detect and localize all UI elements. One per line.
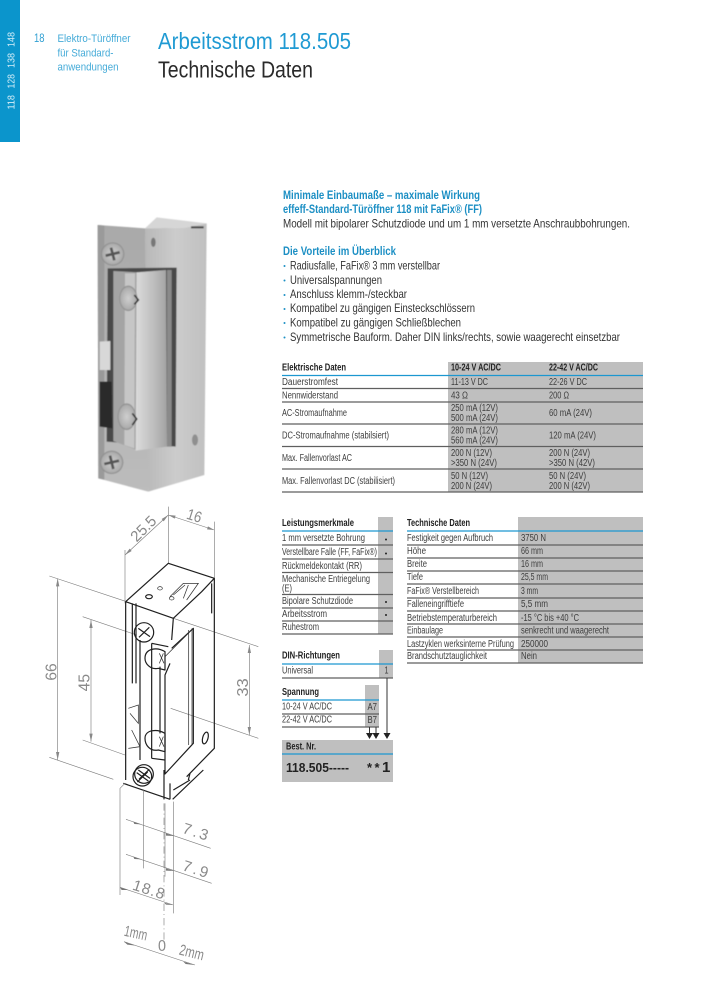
subtitle: Technische Daten [158, 56, 313, 82]
table header: 10-24 V AC/DC [451, 362, 501, 374]
table rows: Ruhestrom [282, 622, 319, 633]
Spannung rows: A7 [368, 702, 377, 713]
dimension lines: 25.5 [127, 513, 160, 545]
DIN row: 1 [384, 666, 389, 676]
table rows: 60 mA (24V) [549, 408, 592, 419]
drawing: lower part and offset scale: 2mm [177, 942, 206, 964]
drawing: lower part and offset scale: 7.9 [180, 858, 210, 882]
table rows: Bipolare Schutzdiode [282, 596, 353, 607]
screws [134, 623, 165, 783]
intro heading: Minimale Einbaumaße – maximale Wirkung [283, 190, 480, 202]
table: DIN-Richtungen [282, 650, 393, 678]
drawing: lower part and offset scale: 18.8 [130, 877, 167, 903]
Spannung rows: 22-42 V AC/DC [282, 714, 332, 726]
table rows: 120 mA (24V) [549, 430, 596, 442]
table header: Elektrische Daten [282, 362, 346, 374]
table rows: Höhe [407, 546, 426, 557]
dimension lines: 45 [76, 674, 93, 691]
table rows: -15 °C bis +40 °C [521, 613, 579, 624]
table rows: 11-13 V DC [451, 377, 488, 388]
table rows: Rückmeldekontakt (RR) [282, 561, 362, 572]
table header [282, 362, 598, 374]
table rows: Falleneingrifftiefe [407, 599, 464, 610]
table rows: 22-26 V DC [549, 377, 587, 388]
DIN row: Universal [282, 666, 313, 676]
title: Arbeitsstrom 118.505 [158, 28, 351, 54]
order number: * [374, 760, 380, 775]
advantages list [283, 245, 620, 344]
table rows: 3750 N [521, 533, 546, 544]
table rows: 16 mm [521, 559, 543, 570]
table rows: Mechanische Entriegelung [282, 574, 370, 585]
table rows: 50 N (12V) [451, 471, 488, 482]
dimension lines: 33 [235, 678, 252, 697]
table rows: 200 N (24V) [451, 481, 492, 492]
order label: Best. Nr. [286, 742, 316, 752]
table rows: 66 mm [521, 546, 543, 557]
sidebar series numbers [6, 32, 18, 110]
lock body [126, 563, 214, 783]
sidebar series numbers: 128 [6, 74, 18, 88]
table rows: Festigkeit gegen Aufbruch [407, 533, 493, 544]
table rows: Verstellbare Falle (FF, FaFix®) [282, 547, 377, 558]
section label [58, 33, 131, 74]
table rows: 200 N (24V) [549, 448, 590, 459]
table rows: 250 mA (12V) [451, 403, 498, 414]
table rows: 43 Ω [451, 390, 468, 402]
sidebar series numbers: 118 [6, 95, 18, 110]
product photo: door opener [98, 217, 207, 492]
list items: Kompatibel zu gängigen Schließblechen [290, 316, 461, 330]
table rows: DC-Stromaufnahme (stabilsiert) [282, 430, 389, 442]
page number: 18 [34, 33, 44, 45]
table rows: Arbeitsstrom [282, 609, 327, 620]
table rows: Dauerstromfest [282, 377, 338, 388]
intro heading: effeff-Standard-Türöffner 118 mit FaFix® (FF) [283, 204, 482, 216]
intro text block [283, 190, 630, 230]
table rows: Max. Fallenvorlast AC [282, 453, 352, 464]
table rows: 200 N (12V) [451, 448, 492, 459]
table rows: (E) [282, 584, 292, 594]
table: Spannung [282, 685, 379, 727]
dimension lines [44, 506, 258, 779]
table rows: 3 mm [521, 586, 538, 597]
table header: Technische Daten [407, 518, 470, 529]
table rows: Breite [407, 559, 427, 570]
table rows: 5,5 mm [521, 599, 548, 610]
list items: Radiusfalle, FaFix® 3 mm verstellbar [290, 258, 440, 272]
order number: 118.505----- [286, 760, 349, 775]
table rows: 50 N (24V) [549, 471, 586, 482]
table rows: 500 mA (24V) [451, 413, 498, 424]
dimension lines: 16 [184, 506, 204, 527]
table: Leistungsmerkmale [282, 517, 393, 634]
table rows: 200 N (42V) [549, 481, 590, 492]
table: Elektrische Daten [282, 362, 643, 492]
table header: Leistungsmerkmale [282, 518, 354, 529]
sidebar series numbers: 138 [6, 53, 18, 68]
Spannung rows [282, 702, 377, 726]
Spannung rows: B7 [368, 715, 377, 726]
arrows to order number [366, 678, 390, 739]
Spannung rows: 10-24 V AC/DC [282, 702, 332, 712]
table rows: FaFix® Verstellbereich [407, 586, 479, 597]
drawing: lower part and offset scale [120, 767, 212, 965]
sidebar series numbers: 148 [6, 32, 18, 47]
table rows: Betriebstemperaturbereich [407, 613, 497, 624]
list heading: Die Vorteile im Überblick [283, 245, 397, 258]
drawing: lower part and offset scale: 1mm [123, 923, 149, 944]
sidebar tab [0, 0, 20, 142]
section label: für Standard- [58, 48, 114, 60]
table rows: >350 N (24V) [451, 458, 497, 469]
list items: Symmetrische Bauform. Daher DIN links/rechts, sowie waagerecht einsetzbar [290, 330, 620, 344]
table rows: >350 N (42V) [549, 458, 595, 469]
DIN row [282, 666, 389, 676]
table rows: Brandschutztauglichkeit [407, 651, 487, 662]
order number: 1 [382, 759, 390, 776]
table rows: Einbaulage [407, 626, 443, 636]
technical drawing with dimensions [44, 506, 258, 965]
intro heading [283, 190, 482, 216]
title [158, 28, 351, 82]
Spannung heading: Spannung [282, 687, 319, 698]
table rows: senkrecht und waagerecht [521, 626, 609, 636]
table rows: AC-Stromaufnahme [282, 408, 347, 419]
table rows: Nein [521, 651, 537, 662]
table rows [407, 533, 609, 662]
order number [286, 759, 390, 776]
table rows: Tiefe [407, 572, 423, 583]
table rows: Nennwiderstand [282, 390, 338, 402]
section label: anwendungen [58, 62, 118, 74]
list items: Anschluss klemm-/steckbar [290, 287, 407, 301]
table rows: 25,5 mm [521, 572, 548, 583]
order number: * [367, 760, 373, 775]
order number box [282, 740, 393, 782]
drawing: lower part and offset scale: 0 [158, 938, 166, 955]
DIN heading: DIN-Richtungen [282, 650, 340, 662]
section label: Elektro-Türöffner [58, 33, 131, 45]
drawing: upper part [44, 506, 258, 783]
table rows [282, 533, 387, 633]
list items: Universalspannungen [290, 273, 382, 287]
table rows: 280 mA (12V) [451, 426, 498, 436]
table rows: Max. Fallenvorlast DC (stabilisiert) [282, 476, 395, 487]
list items: Kompatibel zu gängigen Einsteckschlössern [290, 301, 475, 315]
drawing: lower part and offset scale: 7.3 [180, 820, 210, 845]
table rows [282, 377, 596, 492]
dimension lines: 66 [44, 663, 61, 681]
table: Technische Daten [407, 517, 643, 663]
table rows: 1 mm versetzte Bohrung [282, 533, 365, 544]
list items [284, 258, 620, 344]
intro sentence: Modell mit bipolarer Schutzdiode und um 1 mm versetzte Anschraubbohrungen. [283, 216, 630, 230]
table rows: 200 Ω [549, 390, 569, 402]
table rows: Lastzyklen werksinterne Prüfung [407, 639, 514, 650]
table header: 22-42 V AC/DC [549, 362, 598, 374]
table rows: 560 mA (24V) [451, 436, 498, 446]
table rows: 250000 [521, 639, 548, 650]
